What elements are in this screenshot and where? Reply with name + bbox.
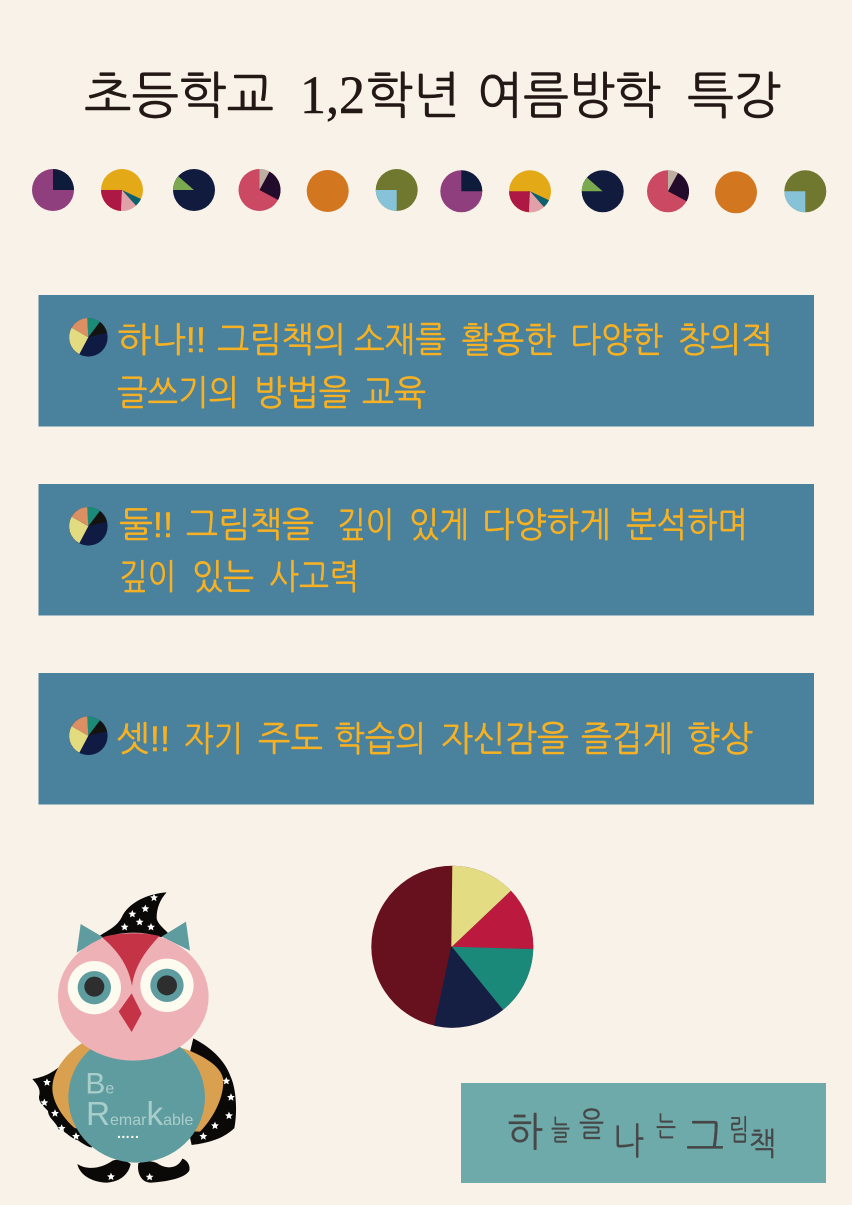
text: item three: 셋!!	[116, 720, 170, 759]
text: item two: 깊이	[337, 506, 394, 545]
title	[84, 65, 781, 125]
icon: navy pie 1	[173, 169, 215, 211]
text: item one	[117, 321, 773, 413]
text: item one: 교육	[362, 374, 426, 413]
owl left eye	[68, 961, 121, 1014]
brand text: 그	[686, 1116, 724, 1160]
owl crown	[102, 933, 159, 986]
text: item two	[119, 506, 748, 597]
text: item three: 학습의	[334, 720, 426, 759]
icon: mini pie two	[69, 507, 108, 546]
title: 초등학교	[84, 68, 274, 124]
icon: yellow pie 2	[509, 170, 551, 212]
text: item two: 사고력	[269, 558, 359, 597]
text: item two: 그림책을	[186, 506, 314, 545]
owl head	[58, 933, 209, 1061]
icon: purple pie 2	[440, 170, 482, 212]
icon: mini pie three	[69, 716, 108, 755]
owl hat	[98, 892, 170, 943]
text: item one: 하나!!	[117, 321, 206, 360]
owl right eye	[140, 959, 194, 1012]
text: item one: 활용한	[461, 321, 556, 360]
icon: yellow pie 1	[101, 169, 143, 211]
icon: mini pie one	[69, 318, 108, 357]
text: item three: 즐겁게	[581, 720, 673, 759]
icon: orange circle 1	[307, 170, 349, 212]
text: item one: 소재를	[354, 321, 446, 360]
panel: item two	[38, 484, 814, 616]
icon: purple pie 1	[32, 169, 74, 211]
text: item one: 그림책의	[217, 321, 346, 360]
owl left wing	[32, 1062, 100, 1148]
brand text: 책	[749, 1126, 776, 1162]
icon: orange circle 2	[715, 171, 757, 213]
text: item three: 자기	[184, 720, 243, 759]
brand text: 늘	[551, 1115, 570, 1146]
panel: item three	[38, 673, 814, 804]
brand text: 을	[579, 1106, 604, 1143]
chart: large pie	[371, 866, 533, 1028]
text: item two: 있게	[409, 506, 469, 545]
icon: navy pie 2	[582, 170, 624, 212]
brand text: 나	[613, 1121, 644, 1162]
icon: olive pie 2	[784, 170, 826, 212]
panel: brand label	[461, 1083, 826, 1183]
owl ears	[77, 922, 190, 953]
brand text: 하	[507, 1111, 543, 1155]
illustration: owl	[32, 892, 236, 1183]
row of small pie icons	[32, 169, 826, 213]
owl body	[68, 1032, 205, 1163]
owl feet	[77, 1160, 131, 1183]
brand text	[507, 1106, 776, 1162]
text: item one: 방법을	[254, 374, 351, 413]
text: item three: 자신감을	[441, 720, 569, 759]
icon: olive pie 1	[376, 169, 418, 211]
owl body text: Remarkable	[86, 1096, 193, 1133]
brand text: 는	[656, 1111, 676, 1142]
text: item one: 다양한	[570, 321, 663, 360]
owl right wing	[180, 1038, 236, 1145]
text: item three: 주도	[258, 720, 323, 759]
owl body text: Be	[85, 1067, 114, 1100]
owl dots	[118, 1136, 138, 1138]
owl back body	[52, 1043, 223, 1132]
text: item two: 있는	[192, 558, 254, 597]
text: item two: 깊이	[119, 558, 176, 597]
text: item three	[116, 720, 753, 759]
title: 여름방학	[477, 68, 661, 124]
brand text: 림	[729, 1115, 749, 1147]
text: item two: 분석하며	[626, 506, 748, 545]
icon: rose pie 2	[647, 170, 689, 212]
text: item two: 둘!!	[119, 506, 173, 545]
owl stars	[40, 894, 235, 1180]
title: 학년	[366, 68, 460, 124]
owl beak	[119, 993, 142, 1032]
text: item three: 향상	[687, 720, 753, 759]
owl body text	[85, 1067, 193, 1133]
title: 1,2	[300, 65, 365, 125]
text: item two: 다양하게	[482, 506, 611, 545]
panel: item one	[38, 295, 814, 426]
text: item one: 창의적	[678, 321, 773, 360]
title: 특강	[687, 68, 781, 124]
text: item one: 글쓰기의	[117, 374, 239, 413]
icon: rose pie 1	[239, 169, 281, 211]
